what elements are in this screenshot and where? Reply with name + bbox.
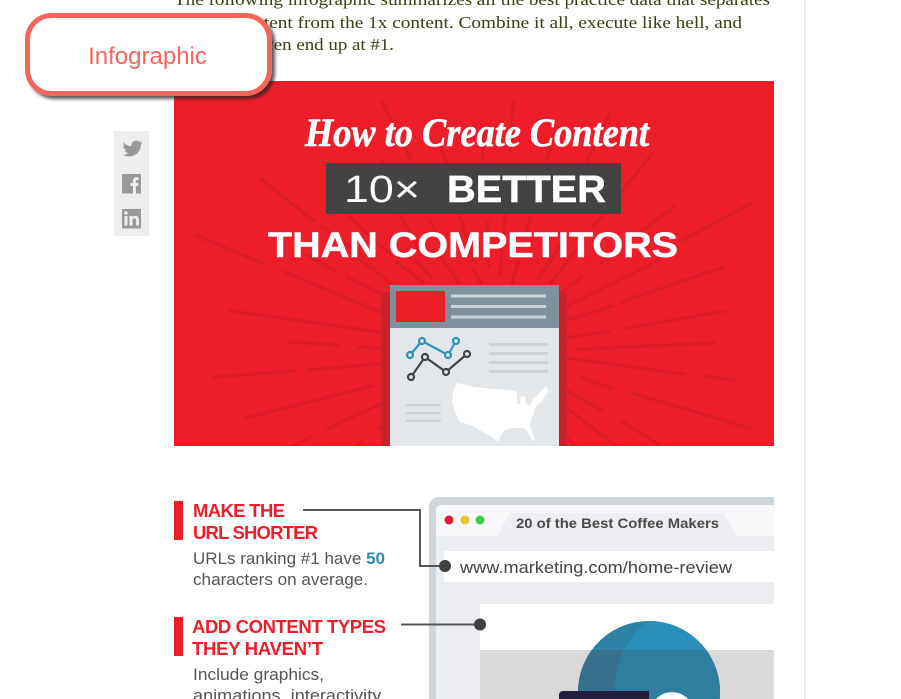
text lines right	[489, 343, 548, 373]
heading: how to create content: How to Create Content	[304, 110, 651, 155]
heading box: 10x better	[326, 163, 621, 214]
icon: facebook	[122, 174, 141, 194]
icon: twitter	[123, 141, 143, 156]
page content area	[480, 604, 774, 699]
intro paragraph: you might even end up at #1.	[174, 35, 394, 54]
intro paragraph: the 10x content from the 1x content. Combine it all, execute like hell, and	[174, 13, 743, 32]
map of the United States	[452, 383, 548, 442]
tip: make the url shorter: URLs ranking #1 have 50	[193, 549, 385, 568]
browser tab	[497, 513, 738, 536]
tip: add content types	[174, 616, 386, 699]
intro paragraph	[174, 0, 770, 54]
callout: infographic label: Infographic	[88, 43, 207, 70]
tip: add content types: ADD CONTENT TYPES	[192, 616, 386, 637]
callout: infographic label	[28, 16, 270, 94]
window buttons	[444, 516, 484, 524]
browser tab: 20 of the Best Coffee Makers	[516, 515, 719, 531]
tip: make the url shorter: MAKE THE	[193, 500, 285, 521]
tip: add content types: THEY HAVEN’T	[192, 638, 324, 659]
browser title bar	[436, 505, 774, 536]
blue circle graphic	[578, 621, 720, 699]
connector: content types	[401, 618, 486, 630]
document illustration	[390, 285, 559, 446]
tip: make the url shorter: URL SHORTER	[193, 522, 318, 543]
heading box: 10x better: 10×	[344, 169, 420, 211]
icon: linkedin	[122, 209, 141, 228]
connector: url shorter	[303, 510, 451, 572]
tip: make the url shorter	[174, 500, 385, 589]
social share bar	[114, 131, 149, 236]
tip: add content types: Include graphics,	[193, 665, 324, 684]
document header	[390, 285, 559, 328]
panel: red hero banner	[174, 81, 774, 446]
heading: than competitors: THAN COMPETITORS	[268, 226, 678, 265]
heading box: 10x better: BETTER	[447, 169, 606, 211]
panel: browser mockup	[429, 497, 774, 699]
tip: make the url shorter: characters on average.	[193, 570, 368, 589]
url bar	[444, 551, 774, 582]
text lines left	[406, 404, 441, 422]
url bar: www.marketing.com/home-review	[459, 558, 733, 577]
dark coffee maker top	[559, 691, 649, 699]
document drop shadow	[381, 292, 567, 446]
line chart	[407, 338, 470, 380]
article column divider	[804, 0, 806, 699]
white dial	[656, 692, 688, 699]
